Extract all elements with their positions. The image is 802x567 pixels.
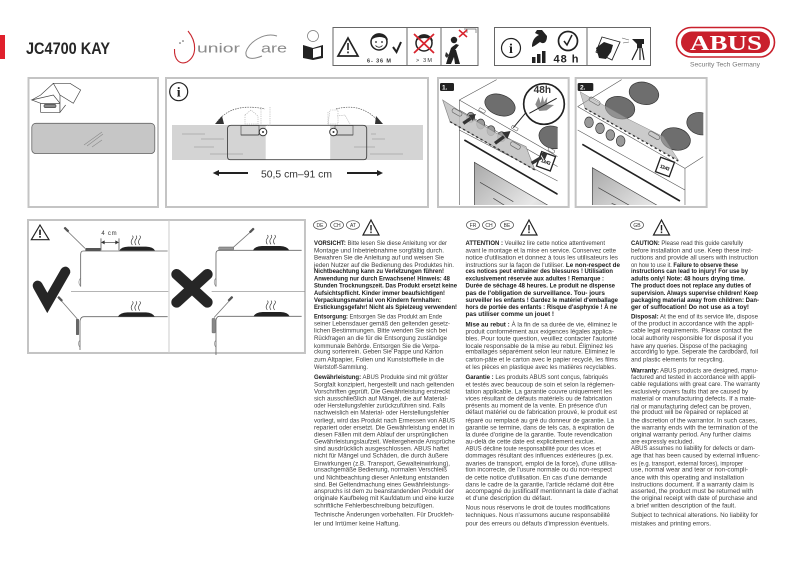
text block: French warranty: vices résultant de défauts matériels ou de fabrication — [466, 396, 612, 403]
icon: clock 48 h — [554, 32, 579, 65]
language badges DE CH AT: AT — [350, 223, 356, 229]
mirror strip — [32, 123, 155, 154]
panel: step 2 positioned — [576, 78, 717, 242]
text block: German warranty: Vorschriften geprüft. Die Gewährleistung erstreckt — [314, 388, 450, 395]
text block: French safety: pas utiliser comme un jouet ! — [466, 311, 554, 318]
text block: English warranty: a brief written description of the fault. — [631, 502, 736, 509]
correct: top placement: 4 cm — [101, 231, 117, 237]
icon: info circle: i — [509, 42, 513, 57]
text block: English safety: The product does not replace any duties of — [631, 283, 752, 290]
text block: German disclaimer: Technische Änderungen vorbehalten. Für Druckfeh- — [314, 511, 454, 519]
text block: French warranty: ABUS décline toute responsabilité pour des vices et — [466, 445, 601, 452]
step badge 1 — [440, 83, 454, 91]
panel: step 1 attach: 13:43 — [540, 158, 551, 167]
text block: German warranty: anspruchs ist dem zu beanstandenden Produkt der — [314, 488, 455, 495]
icon: child reaching shelf — [445, 29, 476, 64]
text block: French disposal — [466, 319, 619, 371]
icon: clock 48 h: 48 h — [554, 53, 579, 65]
logo: Junior Care — [174, 31, 287, 63]
arrow: extend left — [213, 170, 248, 176]
language badges DE CH AT: DE — [317, 223, 324, 229]
text block: German warranty: Sorgfalt konzipiert, hergestellt und nach geltenden — [314, 381, 454, 388]
text block: German disposal: kommunale Behörde. Entsorgen Sie die Verpa- — [314, 343, 440, 350]
language badge GB: GB — [633, 223, 641, 229]
text block: German disposal: Entsorgung: Entsorgen Sie das Produkt am Ende — [314, 314, 442, 321]
icon: cross mark — [177, 274, 207, 302]
text block: French disclaimer: pour des erreurs ou défauts d'impression éventuels. — [466, 520, 609, 527]
text block: German safety: jeden Nutzer auf die Bedienung des Produktes hin. — [313, 262, 454, 269]
text block: German disposal: zum Altpapier, Folien und Kunststoffteile in die — [314, 357, 444, 364]
text block: French disclaimer — [466, 504, 611, 527]
text block: French disposal: bles. Pour toute question, veuillez contacter l'autorité — [466, 336, 617, 343]
icon: info circle — [170, 83, 188, 101]
icon: warning triangle GB — [654, 220, 670, 235]
language badges FR CH BE: CH — [485, 223, 493, 229]
logo: Junior Care: are — [261, 40, 287, 56]
callout: no touching for 48h: 48h — [534, 85, 551, 96]
text block: German warranty: unsachgemäße Bedienung, normalen Verschleiß — [314, 466, 447, 473]
text block: French warranty: dans le cadre de la garantie, l'article réclamé doit être — [466, 481, 614, 488]
text block: French safety: instructions sur la façon de l'utiliser. Le non-respect de — [466, 262, 620, 269]
text block: English disposal: of the product in accordance with the appli- — [631, 321, 754, 328]
text block: German warranty: repariert oder ersetzt. Die Gewährleistung endet in — [314, 424, 454, 431]
text block: French safety: pas de l'obligation de surveillance. Tou- jours — [466, 290, 605, 297]
text block: French warranty: au-delà de cette date est explicitement exclue. — [466, 438, 595, 445]
text block: French disposal: locale responsable de la mise au rebut. Éliminez les — [466, 341, 614, 350]
text block: French warranty: défaut matériel ou de fabrication prouvé, le produit est — [466, 409, 617, 416]
text block: French warranty: accompagné du justificatif mentionnant la date d'achat — [466, 488, 618, 495]
information pictogram box — [494, 28, 650, 66]
text block: German warranty: sind. Bei Geltendmachung eines Gewährleistungs- — [314, 481, 450, 488]
icon: spray bottle — [622, 38, 644, 60]
text block: German warranty: nachweislich ein Material- oder Herstellungsfehler — [314, 410, 450, 417]
text block: English warranty: es (e.g. transport, external forces), improper — [631, 460, 744, 467]
text block: German warranty: sich ausschließlich auf Mängel, die auf Material- — [314, 396, 448, 403]
text block: English disposal: have any queries. Dispose of the packaging — [631, 343, 747, 350]
text block: English disposal: and plastic elements for recycling. — [631, 357, 724, 364]
text block: English safety: instructions can lead to injury! For use by — [631, 268, 748, 275]
icon: check mark — [393, 42, 401, 52]
text block: German warranty: originale Kaufbeleg mit Kaufdatum und eine kurze — [314, 495, 454, 502]
panel: correct and wrong placement — [28, 220, 305, 355]
text block: German warranty: schriftliche Fehlerbeschreibung beizufügen. — [314, 502, 434, 509]
icon: child 6-36 months: 6- 36 M — [367, 58, 391, 64]
step badge 2 — [578, 83, 593, 91]
icon: crossed child over 3 months — [414, 34, 434, 64]
language badges FR CH BE — [466, 221, 514, 229]
logo: Junior Care: unior — [197, 40, 241, 56]
text block: English warranty: rial or manufacturing defect can be proven, — [631, 404, 751, 411]
text block: German disposal: seiner Lebensdauer gemäß den geltenden gesetz- — [314, 321, 450, 328]
text block: French warranty: et testés avec beaucoup de soin et selon la réglemen- — [466, 381, 615, 388]
panel: step 1 attach — [437, 77, 570, 208]
correct: side placement — [57, 296, 168, 350]
icon: read manual — [303, 30, 323, 60]
text block: French warranty: avaries de transport, emploi de la force), d'une utilisa- — [466, 460, 617, 467]
text block: English safety: ger of suffocation! Do not use as a toy! — [631, 304, 749, 311]
text block: German disposal — [314, 314, 450, 371]
text block: English warranty: factured and tested in accordance with appli- — [631, 374, 756, 381]
text block: German warranty: und Nichtbeachtung dieser Anleitung entstanden — [314, 474, 449, 481]
text block: German disposal: lichen Bestimmungen. Bitte wenden Sie sich bei — [314, 328, 447, 335]
text block: German safety: Bewahren Sie die Anleitung auf und weisen Sie — [314, 255, 444, 262]
text block: French warranty: Garantie : Les produits ABUS sont conçus, fabriqués — [466, 374, 609, 381]
icon: strength arm — [532, 30, 547, 63]
title: JC4700 KAY — [26, 39, 111, 58]
correct: top placement — [64, 227, 168, 287]
text block: German warranty — [314, 374, 455, 509]
text block: French disclaimer: techniques. Nous n'assumons aucune responsabilité — [466, 512, 610, 519]
text block: German safety: Erstickungsgefahr! Nicht als Spielzeug verwenden! — [314, 304, 457, 311]
width measurement label: 50,5 cm–91 cm — [261, 168, 332, 180]
panel: package contents — [28, 78, 158, 207]
text block: English warranty: are expressly excluded. — [631, 438, 694, 445]
icon: warning triangle — [338, 38, 358, 56]
step badge 2: 2. — [580, 84, 586, 91]
text block: French disposal: produit conformément aux exigences légales applica- — [466, 328, 614, 335]
text block: German safety: VORSICHT: Bitte lesen Sie diese Anleitung vor der — [314, 240, 448, 247]
logo: ABUS: ABUS — [690, 31, 762, 55]
text block: German disclaimer: ler und Irrtümer keine Haftung. — [314, 520, 400, 527]
text block: German safety: Nichtbeachtung kann zu Verletzungen führen! — [314, 268, 444, 275]
language badges DE CH AT — [314, 221, 360, 229]
text block: German warranty: Gewährleistung: ABUS Produkte sind mit größter — [314, 374, 449, 381]
text block: English warranty: age that has been caused by external influenc- — [631, 452, 760, 459]
wrong: flat placement — [214, 228, 302, 287]
text block: English disclaimer: Subject to technical alterations. No liability for — [631, 512, 759, 519]
text block: French disposal: Mise au rebut : À la fin de sa durée de vie, éliminez le — [466, 319, 617, 328]
red page marker — [0, 35, 5, 59]
text block: French safety — [466, 240, 620, 318]
text block: German warranty: oder Herstellungsfehler zurückzuführen sind. Falls — [314, 403, 446, 410]
callout: no touching for 48h — [524, 84, 564, 124]
text block: German disclaimer — [314, 511, 454, 527]
icon: open box — [32, 83, 81, 112]
language badges FR CH BE: BE — [504, 223, 511, 229]
step badge 1: 1. — [442, 84, 448, 91]
text block: English disposal — [631, 314, 758, 364]
diagram: mirror on cooker — [172, 107, 423, 160]
text block: French safety: ATTENTION : Veuillez lire cette notice attentivement — [466, 240, 605, 247]
text block: French warranty: réparé ou remplacé au gré du donneur de garantie. La — [466, 417, 614, 424]
text block: English disposal: cable legal requirements. Please contact the — [631, 328, 752, 335]
text block: French safety: surveiller les enfants ! Gardez le matériel d'emballage — [466, 297, 618, 304]
text block: English warranty: the discretion of the warrantor. In such cases, — [631, 417, 757, 424]
text block: English warranty: instructions document. If a warranty claim is — [631, 481, 755, 488]
text block: English warranty: Warranty: ABUS products are designed, manu- — [631, 367, 758, 374]
text block: French safety: Durée de séchage 48 heures. Le produit ne dispense — [466, 283, 615, 290]
icon: warning triangle DE — [363, 220, 379, 235]
logo: ABUS: Security Tech Germany — [690, 62, 761, 68]
text block: French warranty: la durée d'origine de la garantie. Toute revendication — [466, 431, 612, 438]
text block: English disposal: according to type. Seperate the cardboard, foil — [631, 348, 758, 356]
text block: French safety: notice d'utilisation et donnez à tous les utilisateurs les — [466, 255, 619, 262]
text block: French warranty: tion incorrecte, de l'usure normale ou du non-respect — [466, 466, 612, 473]
text block: French safety: hors de portée des enfants : Risque d'asphyxie ! À ne — [466, 302, 617, 311]
language badge GB — [630, 221, 644, 229]
text block: French warranty: dommages résultant des influences extérieures (p.ex. — [466, 452, 613, 459]
text block: German warranty: sind ausdrücklich ausgeschlossen. ABUS haftet — [314, 445, 449, 452]
text block: English safety: ructions and provide all users with instruction — [631, 255, 758, 262]
text block: German safety: Anwendung nur durch Erwachsene! Hinweis: 48 — [314, 275, 450, 282]
text block: English warranty: ABUS assumes no liability for defects or dam- — [631, 445, 755, 452]
icon: check mark — [38, 272, 65, 303]
text block: French disposal: emballages séparément selon leur nature. Éliminez le — [466, 346, 615, 356]
text block: German disposal: ckung sortenrein. Geben Sie Pappe und Karton — [314, 348, 443, 356]
text block: French safety: avant le montage et la mise en service. Conservez cette — [466, 247, 616, 254]
text block: German warranty: diesen Fällen mit dem Ablauf der ursprünglichen — [314, 431, 448, 438]
language badges FR CH BE: FR — [470, 223, 477, 229]
text block: German warranty: Einwirkungen (z.B. Transport, Gewalteinwirkung), — [314, 460, 450, 467]
text block: French warranty: et d'une description du défaut. — [466, 495, 552, 502]
icon: crossed child over 3 months: > 3M — [416, 58, 432, 64]
text block: English disposal: Disposal: At the end of its service life, dispose — [631, 314, 758, 321]
text block: English warranty — [631, 367, 761, 509]
text block: German warranty: nicht für Mängel und Schäden, die durch äußere — [314, 452, 448, 459]
text block: French warranty: de cette notice d'utilisation. En cas d'une demande — [466, 474, 607, 481]
text block: German safety — [313, 240, 457, 311]
text block: English disclaimer — [631, 512, 759, 527]
text block: English safety — [631, 240, 759, 311]
icon: info circle: i — [177, 86, 181, 101]
text block: German disposal: Rückfragen an die für die Entsorgung zuständige — [314, 335, 447, 342]
language badges DE CH AT: CH — [333, 223, 341, 229]
text block: English warranty: material or manufacturing defects. If a mate- — [631, 395, 756, 402]
text block: German warranty: vorliegt, wird das Produkt nach Ermessen von ABUS — [314, 417, 455, 424]
text block: French warranty: garantie se termine, dans de tels cas, à expiration de — [466, 424, 614, 431]
warning pictogram box — [333, 28, 478, 66]
text block: French disposal: carton-pâte et le carton avec le papier recyclé, les films — [466, 357, 619, 364]
text block: French warranty: présents au moment de la vente. En présence d'un — [466, 403, 607, 410]
icon: cloth and hand — [596, 37, 620, 60]
arrow: extend right — [347, 170, 383, 176]
text block: German warranty: Gewährleistungslaufzeit. Weitergehende Ansprüche — [314, 438, 455, 445]
panel: step 2 positioned: 13:43 — [659, 164, 670, 173]
text block: English safety: adults only! Note: 48 hours drying time. — [631, 275, 745, 282]
text block: English warranty: exclusively covers faults that are caused by — [631, 388, 749, 395]
text block: English warranty: the original receipt with date of purchase and — [631, 495, 757, 502]
text block: English safety: before installation and use. Keep these inst- — [631, 247, 753, 254]
text block: English warranty: cable regulations with great care. The warranty — [631, 381, 761, 388]
text block: English warranty: asserted, the product must be returned with — [631, 488, 753, 495]
text block: German safety: Aufsichtspflicht. Kinder immer beaufsichtigen! — [314, 290, 445, 297]
panel: adjustable width info — [166, 78, 428, 207]
text block: English warranty: ance with this operating and installation — [631, 474, 744, 481]
text block: French warranty — [466, 374, 618, 502]
text block: English safety: packaging material away from children: Dan- — [631, 297, 759, 304]
text block: English warranty: use, normal wear and tear or non-compli- — [631, 466, 748, 473]
text block: French safety: exclusivement réservée aux adultes ! Remarque : — [466, 275, 604, 282]
icon: info circle — [502, 38, 520, 58]
text block: English warranty: original warranty period. Any further claims — [631, 431, 752, 438]
text block: German disposal: Wertstoff-Sammlung. — [314, 364, 368, 371]
text block: English disclaimer: mistakes and printing errors. — [631, 520, 711, 527]
text block: German safety: Montage und Inbetriebnahme sorgfältig durch. — [314, 247, 444, 254]
logo: ABUS — [676, 28, 774, 68]
text block: English safety: on how to use it. Failure to observe these — [631, 262, 738, 269]
text block: English safety: supervision. Always supervise children! Keep — [631, 290, 758, 297]
icon: warning triangle — [31, 225, 49, 240]
icon: child 6-36 months — [367, 33, 391, 64]
wrong: side placement — [212, 296, 302, 355]
text block: English warranty: the product will be repaired or replaced at — [631, 409, 748, 416]
text block: English warranty: the warranty ends with the termination of the — [631, 424, 758, 431]
text block: French disposal: et les pièces en plastique avec les matières recyclables. — [466, 364, 616, 371]
text block: English disposal: local authority responsible for disposal if you — [631, 335, 753, 342]
text block: French safety: ces notices peut entraîner des blessures ! Utilisation — [466, 268, 613, 275]
text block: English safety: CAUTION: Please read this guide carefully — [631, 240, 744, 247]
icon: warning triangle FR — [521, 220, 537, 235]
text block: German safety: Verpackungsmaterial von Kindern fernhalten: — [314, 297, 441, 304]
text block: French warranty: tation applicable. La garantie couvre uniquement les — [466, 388, 613, 395]
text block: French disclaimer: Nous nous réservons le droit de toutes modifications — [466, 504, 611, 511]
text block: German safety: Stunden Trocknungszeit. Das Produkt ersetzt keine — [314, 283, 457, 290]
